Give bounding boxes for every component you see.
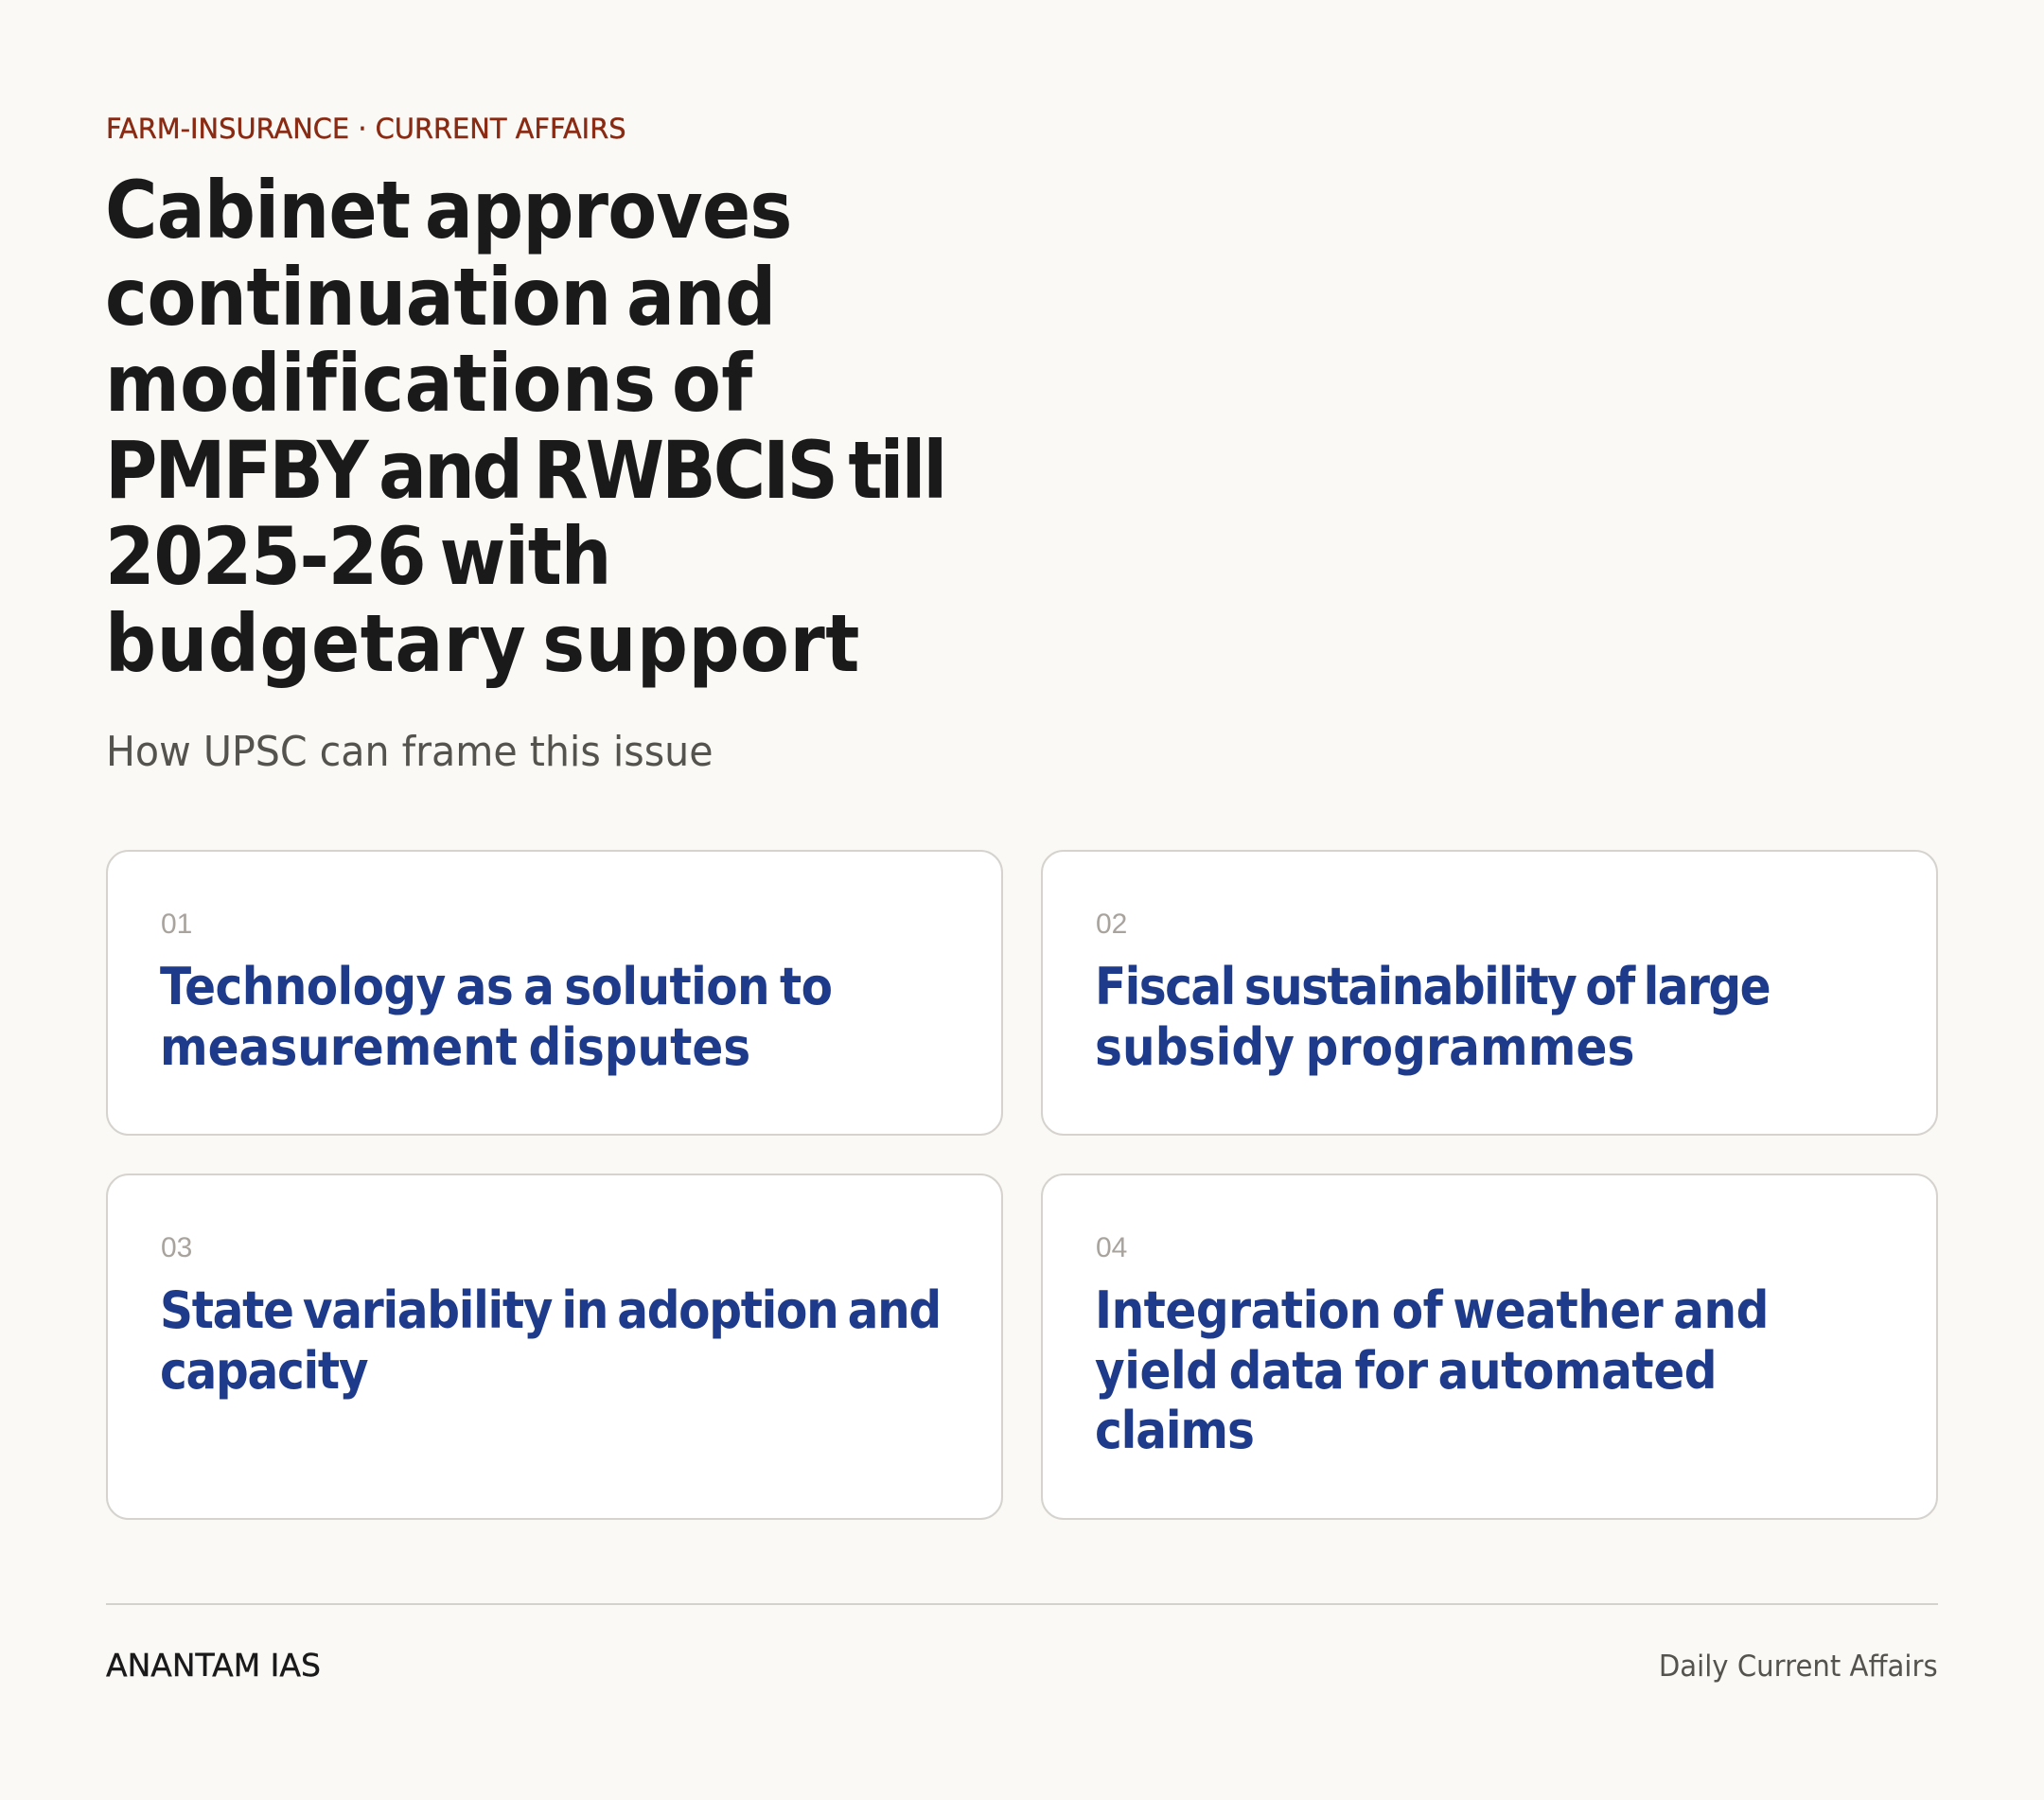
panel: card 03: [106, 1174, 1003, 1520]
card heading 03: capacity: [160, 1340, 367, 1401]
title: PMFBY and RWBCIS till: [105, 424, 944, 517]
card number 01: 01: [161, 909, 192, 940]
card heading 03: [160, 1280, 941, 1401]
card heading 01: [160, 957, 832, 1077]
card heading 01: measurement disputes: [160, 1016, 750, 1077]
card heading 02: subsidy programmes: [1095, 1016, 1635, 1077]
card heading 03: State variability in adoption and: [160, 1280, 941, 1340]
card heading 02: Fiscal sustainability of large: [1095, 957, 1770, 1016]
panel: card 01: [106, 850, 1003, 1136]
card heading 04: [1095, 1280, 1769, 1460]
subtitle: How UPSC can frame this issue: [106, 728, 714, 776]
card heading 01: Technology as a solution to: [160, 957, 832, 1016]
panel: card 04: [1041, 1174, 1938, 1520]
title: budgetary support: [105, 597, 860, 690]
card heading 04: claims: [1095, 1401, 1254, 1460]
card number 03: 03: [161, 1232, 192, 1263]
title: modifications of: [105, 337, 752, 430]
card heading 02: [1095, 957, 1770, 1077]
footer brand: ANANTAM IAS: [106, 1647, 321, 1684]
card heading 04: Integration of weather and: [1095, 1280, 1769, 1340]
eyebrow label: FARM-INSURANCE · CURRENT AFFAIRS: [106, 113, 626, 145]
panel: card 02: [1041, 850, 1938, 1136]
card heading 04: yield data for automated: [1095, 1340, 1717, 1401]
title: continuation and: [105, 251, 776, 344]
card number 04: 04: [1096, 1232, 1127, 1263]
footer note: Daily Current Affairs: [1659, 1650, 1938, 1684]
title: Cabinet approves: [105, 164, 792, 256]
title: [105, 164, 944, 690]
title: 2025-26 with: [105, 510, 610, 603]
card number 02: 02: [1096, 909, 1127, 940]
